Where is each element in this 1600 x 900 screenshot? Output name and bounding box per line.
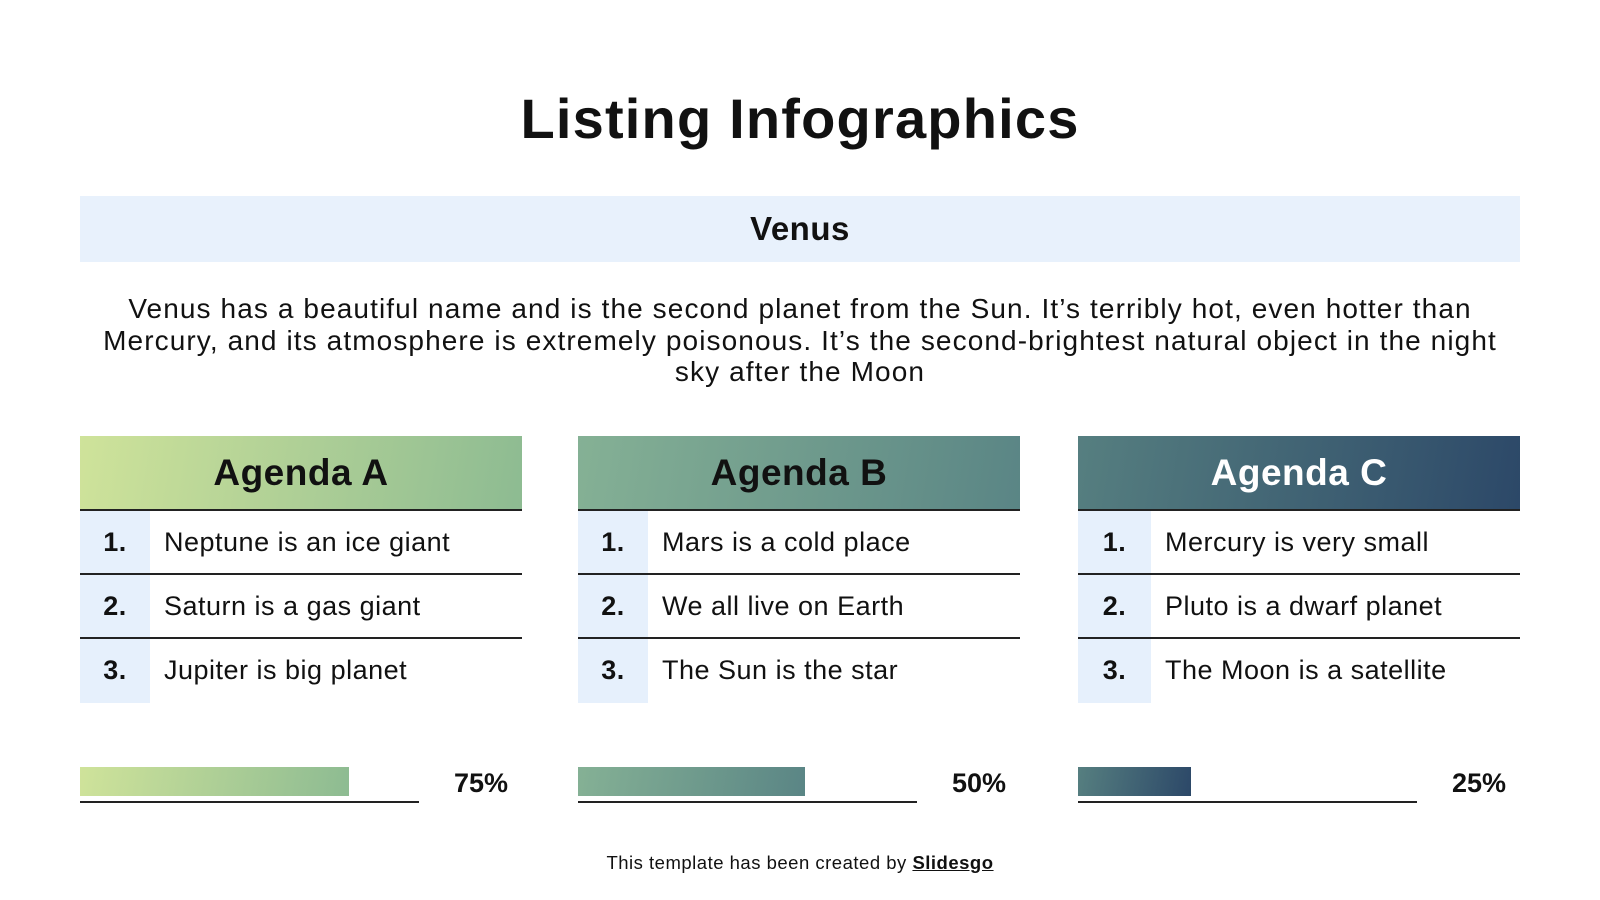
heading band: Venus: Venus bbox=[750, 210, 850, 247]
header: Agenda C: Agenda C bbox=[1211, 452, 1387, 493]
item 2 bbox=[1078, 575, 1520, 639]
item 2 bbox=[80, 575, 522, 639]
description text: Mercury, and its atmosphere is extremely poisonous. It’s the second-brightest natural object in the night bbox=[103, 325, 1497, 356]
item 3: 3. bbox=[103, 655, 127, 685]
header: Agenda C bbox=[1078, 436, 1520, 511]
progress bar B 50% bbox=[578, 767, 1006, 803]
description text: sky after the Moon bbox=[675, 356, 925, 387]
progress bar C 25%: 25% bbox=[1452, 768, 1506, 798]
item 1 bbox=[1078, 511, 1520, 575]
panel: Agenda A bbox=[80, 436, 522, 703]
header: Agenda A bbox=[80, 436, 522, 511]
footer credit: This template has been created by Slidesgo bbox=[606, 852, 994, 873]
description text: Venus has a beautiful name and is the second planet from the Sun. It’s terribly hot, even hotter than bbox=[128, 293, 1472, 324]
item 1: 1. bbox=[1103, 527, 1126, 557]
heading band: Venus bbox=[80, 196, 1520, 262]
item 1: Mars is a cold place bbox=[662, 527, 911, 557]
item 1: Neptune is an ice giant bbox=[164, 527, 450, 557]
description text bbox=[103, 293, 1497, 387]
item 3: The Sun is the star bbox=[662, 655, 898, 685]
progress bar A 75%: 75% bbox=[454, 768, 508, 798]
item 2: Pluto is a dwarf planet bbox=[1165, 591, 1442, 621]
item 2 bbox=[578, 575, 1020, 639]
item 3: 3. bbox=[1103, 655, 1126, 685]
item 1 bbox=[578, 511, 1020, 575]
item 2: Saturn is a gas giant bbox=[164, 591, 421, 621]
header: Agenda B bbox=[578, 436, 1020, 511]
progress bar B 50%: 50% bbox=[952, 768, 1006, 798]
item 2: We all live on Earth bbox=[662, 591, 904, 621]
item 3: Jupiter is big planet bbox=[164, 655, 407, 685]
item 3: 3. bbox=[601, 655, 625, 685]
item 3 bbox=[80, 639, 407, 703]
item 2: 2. bbox=[103, 591, 127, 621]
item 1 bbox=[80, 511, 522, 575]
item 2: 2. bbox=[601, 591, 625, 621]
progress bar A 75% bbox=[80, 767, 508, 803]
panel: Agenda C bbox=[1078, 436, 1520, 703]
item 3 bbox=[578, 639, 898, 703]
header: Agenda B: Agenda B bbox=[711, 452, 887, 493]
item 3 bbox=[1078, 639, 1447, 703]
title: Listing Infographics bbox=[520, 87, 1080, 150]
progress bar C 25% bbox=[1078, 767, 1506, 803]
panel: Agenda B bbox=[578, 436, 1020, 703]
item 1: 1. bbox=[601, 527, 625, 557]
header: Agenda A: Agenda A bbox=[213, 452, 389, 493]
item 2: 2. bbox=[1103, 591, 1126, 621]
item 1: Mercury is very small bbox=[1165, 527, 1429, 557]
item 1: 1. bbox=[103, 527, 127, 557]
item 3: The Moon is a satellite bbox=[1165, 655, 1447, 685]
